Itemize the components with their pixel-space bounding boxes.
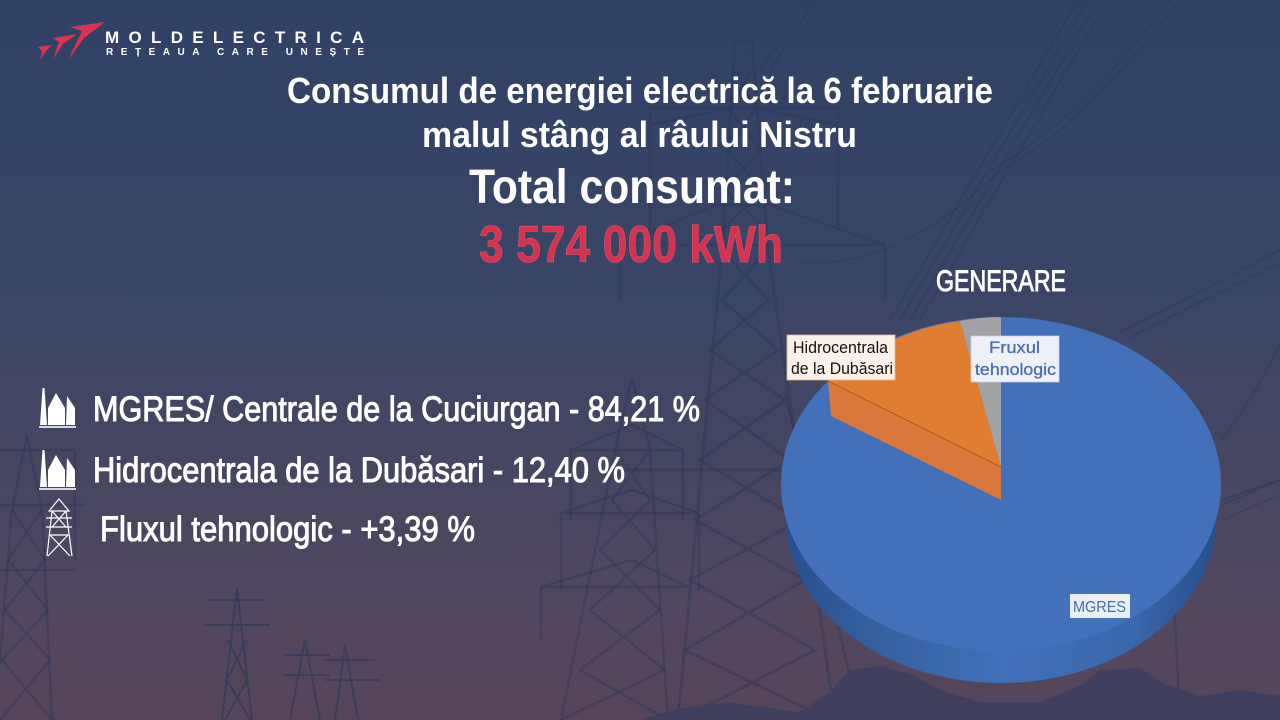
label: MGRES: MGRES [1073, 599, 1126, 616]
wires [760, 0, 1280, 520]
logo [38, 22, 364, 60]
icon: pylon [46, 499, 72, 556]
icon: power plant [39, 388, 76, 428]
label: Dubasari [787, 335, 895, 380]
pie side wall [786, 353, 1216, 683]
label: Dubasari: Hidrocentrala [793, 338, 889, 357]
logo arrows [38, 22, 105, 60]
text: flow share: Fluxul tehnologic - +3,39 % [100, 510, 475, 549]
legend list [39, 388, 700, 556]
second pylon [541, 378, 699, 720]
total consumed value: 3 574 000 kWh [479, 216, 783, 274]
right pylon behind chart [785, 393, 1280, 720]
slice: Dubasari [828, 321, 1001, 500]
title line 1: Consumul de energiei electrică la 6 februarie [287, 70, 993, 111]
slice: MGRES [781, 317, 1221, 651]
slice: technological flow [960, 317, 1001, 467]
distant pylons [205, 588, 380, 720]
icon: hydro plant [39, 450, 76, 490]
logo tagline: REȚEAUA CARE UNEȘTE [106, 47, 364, 58]
chart heading: GENERARE [936, 265, 1066, 298]
row: Dubasari [39, 450, 625, 490]
label: technological flow: Fruxul [989, 338, 1040, 357]
total consumed label: Total consumat: [469, 161, 795, 214]
label: technological flow: tehnologic [975, 360, 1057, 379]
title [287, 70, 993, 155]
text: Dubasari share: Hidrocentrala de la Dubăsari - 12,40 % [93, 451, 625, 490]
pie chart [781, 317, 1221, 683]
text: MGRES share: MGRES/ Centrale de la Cuciurgan - 84,21 % [93, 390, 700, 429]
label: technological flow [971, 336, 1059, 382]
left pylon [0, 435, 85, 720]
row: technological flow [46, 499, 475, 556]
label: Dubasari: de la Dubăsari [791, 359, 893, 378]
label: MGRES [1070, 594, 1130, 618]
title line 2: malul stâng al râului Nistru [422, 114, 857, 155]
main pylon [600, 42, 885, 720]
row: MGRES [39, 388, 700, 429]
logo name: MOLDELECTRICA [105, 28, 364, 47]
tree line [640, 666, 1280, 720]
